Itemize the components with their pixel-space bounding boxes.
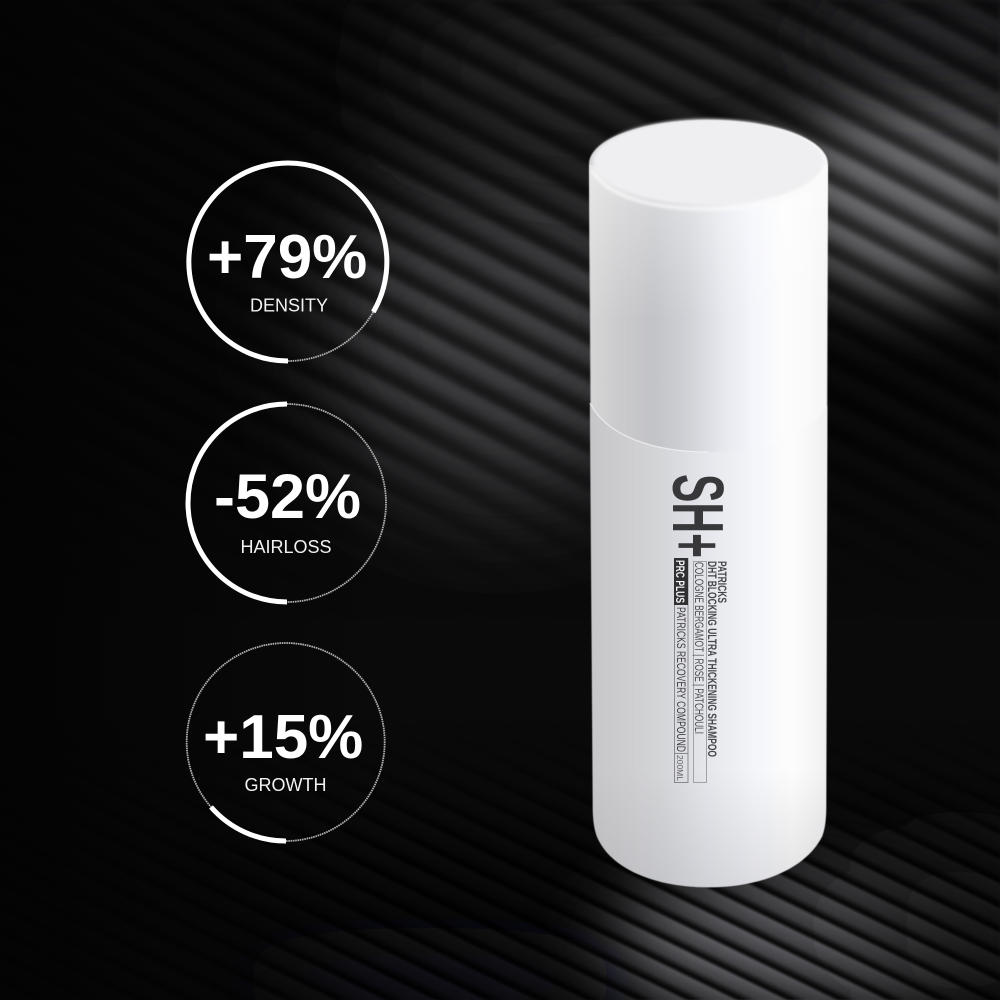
- cologne notes box: COLOGNE BERGAMOT | ROSE | PATCHOULI: [692, 562, 704, 734]
- lid top face: [593, 119, 823, 205]
- value: +15%: [203, 703, 363, 772]
- PRC PLUS recovery compound box: PATRICKS RECOVERY COMPOUND: [674, 607, 686, 752]
- PRC PLUS recovery compound box: [673, 558, 688, 782]
- stat ring: +15% growth: [187, 643, 385, 841]
- label: DENSITY: [250, 296, 328, 316]
- product name: DHT BLOCKING ULTRA THICKENING SHAMPOO: [705, 561, 717, 757]
- lid rim highlight: [592, 170, 825, 209]
- background: dark ribbed surface: [282, 0, 1000, 1000]
- value: +79%: [207, 223, 367, 292]
- ring progress: [211, 807, 286, 841]
- lower bottle section below the seam: [590, 403, 827, 887]
- ring track: [287, 404, 386, 602]
- ring progress: [188, 404, 287, 602]
- bottle body: [589, 120, 828, 887]
- label: HAIRLOSS: [240, 537, 332, 557]
- PRC PLUS recovery compound box: PRC PLUS: [673, 560, 685, 603]
- stat ring: -52% hairloss: [188, 404, 386, 602]
- bottle label: vertical printed text: [657, 474, 737, 782]
- stat ring: +79% density: [189, 163, 387, 361]
- brand name: PATRICKS: [715, 561, 727, 603]
- PRC PLUS recovery compound box: 200ML: [675, 755, 685, 781]
- bottle base shading: [593, 770, 826, 887]
- lid seam line: [590, 403, 708, 452]
- label: GROWTH: [245, 775, 326, 795]
- ring track: [187, 643, 385, 841]
- upper body highlight fade: [589, 165, 828, 320]
- value: -52%: [214, 462, 361, 532]
- SH+ logo: SH+: [657, 474, 737, 558]
- ring track: [288, 312, 373, 361]
- ring progress: [189, 163, 387, 361]
- product: white shampoo bottle: [589, 119, 828, 887]
